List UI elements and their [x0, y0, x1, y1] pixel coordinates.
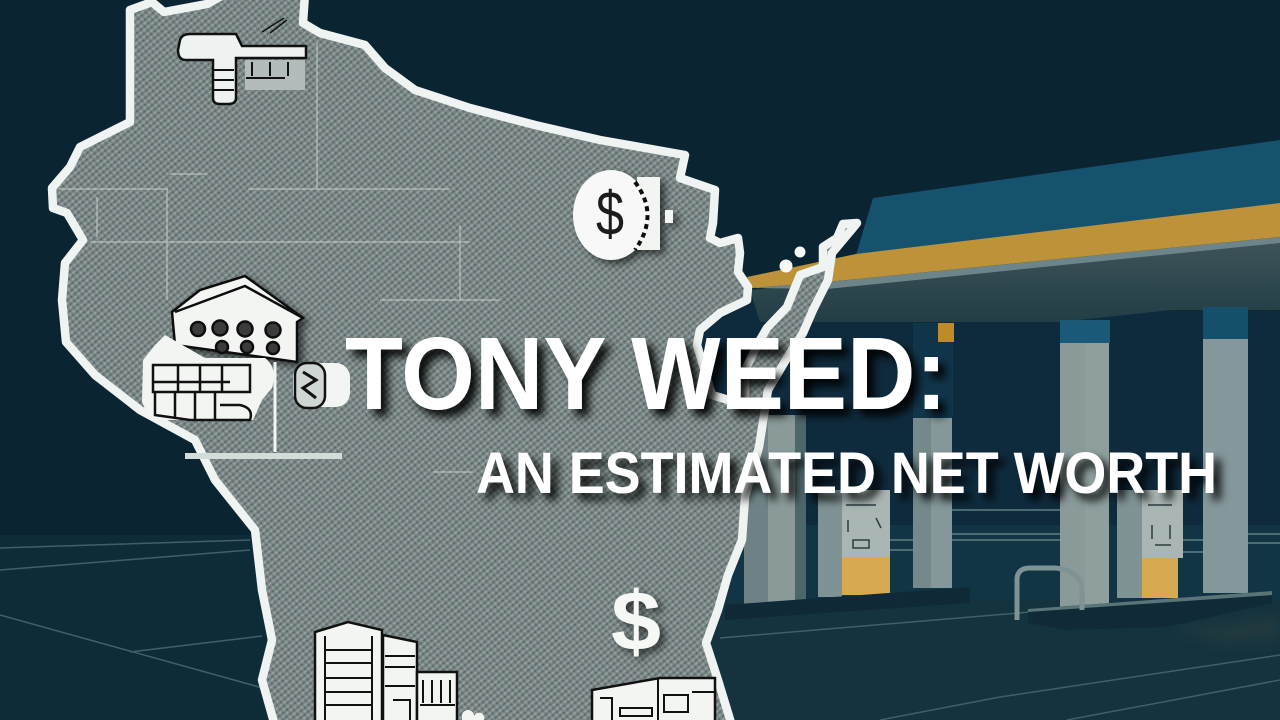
canopy yellow fascia [747, 203, 1280, 288]
coin dollar sign: $ [596, 180, 624, 249]
pump 2 [1117, 490, 1183, 598]
forecourt band behind pumps [700, 510, 1280, 600]
pump island 1 [725, 587, 970, 620]
pump island 2 [1028, 591, 1272, 630]
lamp post [274, 362, 276, 452]
pillar 1 [744, 415, 806, 605]
storefront [142, 335, 274, 420]
base line [185, 453, 342, 459]
title: TONY WEED: [345, 316, 947, 431]
islands [780, 246, 806, 272]
icon: office buildings [315, 622, 484, 720]
subtitle: AN ESTIMATED NET WORTH [476, 441, 1217, 506]
icon: house and storefront [142, 276, 350, 459]
pillar 4 [1203, 307, 1248, 593]
pump 1 [818, 490, 890, 597]
gas station [700, 140, 1280, 630]
icon: dollar coin [573, 170, 673, 260]
capsule sign [293, 363, 350, 408]
map shape [52, 0, 857, 720]
back wall [700, 300, 1280, 535]
county lines [58, 43, 500, 472]
pillar 3 [1060, 320, 1110, 608]
ground plane [0, 535, 1280, 720]
icon: top landmark [178, 18, 306, 104]
icon: small shop [592, 678, 716, 720]
canopy light trim [752, 237, 1280, 289]
pillar 2 [913, 323, 954, 588]
house [172, 276, 303, 362]
map of Wisconsin [52, 0, 857, 720]
canopy underside [750, 242, 1280, 322]
safety rail [1017, 568, 1082, 620]
icon: dollar sign: $ [611, 574, 661, 668]
canopy blue roof [856, 140, 1280, 255]
